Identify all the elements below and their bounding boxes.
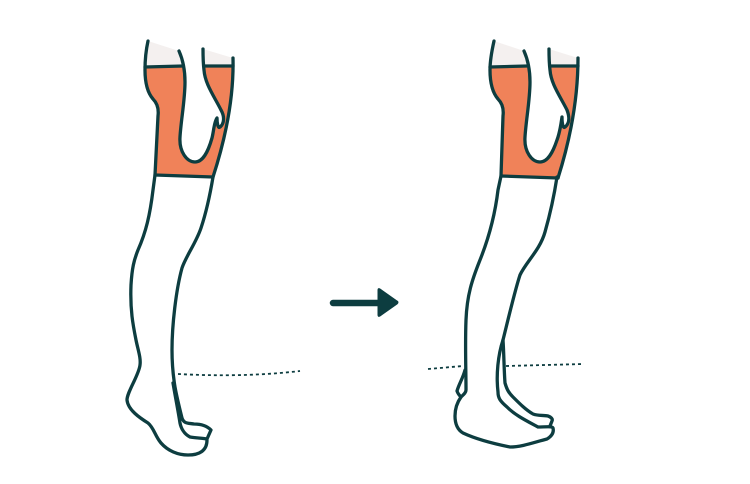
skin tone top left [145, 41, 183, 67]
shorts and rear leg outline [455, 41, 557, 447]
right edge [558, 58, 578, 178]
back heel [457, 370, 465, 397]
waist and hem lines [490, 66, 578, 178]
skin tone top left [490, 41, 527, 67]
dotted line: heel height after, left [428, 366, 463, 369]
dotted line: heel height after, right [506, 364, 584, 366]
inner thigh contour [179, 49, 224, 162]
inner thigh contour [524, 49, 569, 162]
dotted line: heel height before [178, 371, 300, 375]
skin tone top right [203, 49, 233, 66]
shorts [145, 66, 233, 177]
figure: legs after [455, 41, 578, 447]
shorts outline [127, 41, 207, 455]
rear outline and front leg [172, 58, 233, 439]
shorts [490, 66, 578, 178]
second foot [503, 340, 552, 426]
waist and hem lines [145, 66, 233, 177]
skin tone top right [549, 49, 578, 66]
figure: legs before [127, 41, 233, 455]
arrow [333, 289, 398, 316]
